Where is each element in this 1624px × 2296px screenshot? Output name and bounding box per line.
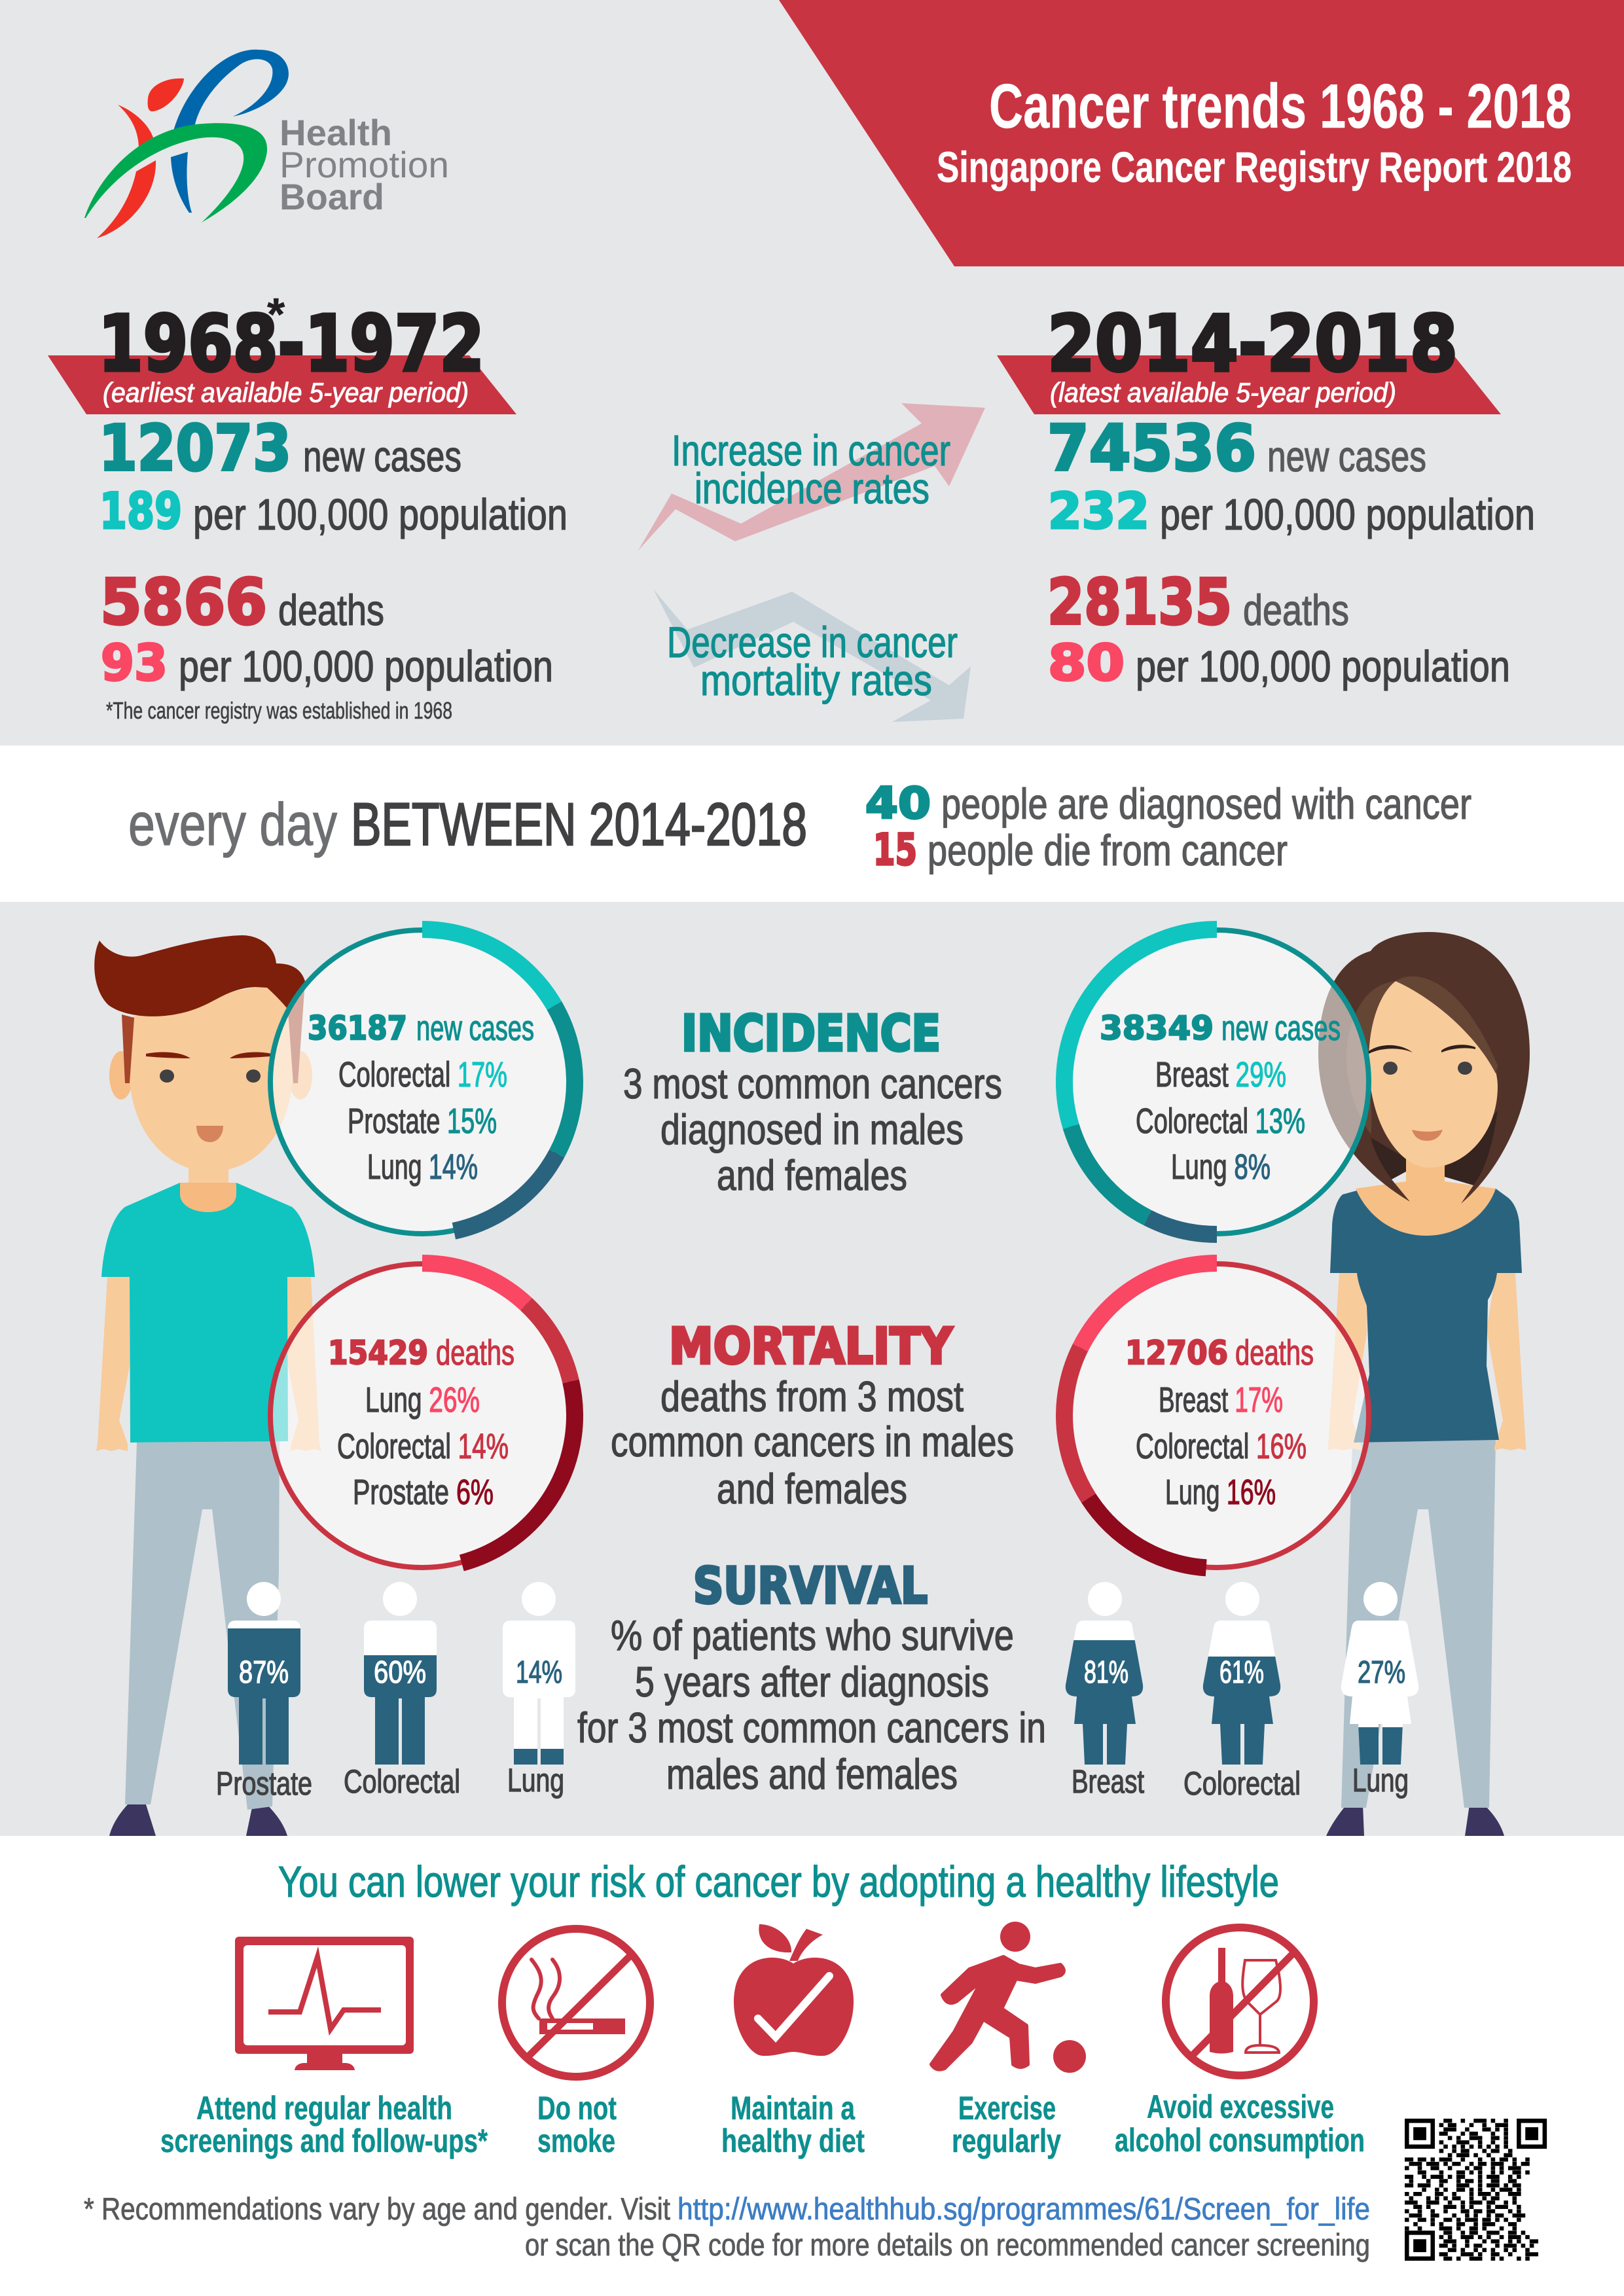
logo: Health Promotion Board: Health [280,112,392,153]
chart: male mortality ring: Lung 26% [365,1380,480,1420]
icon: no alcohol [1166,1928,1314,2075]
QR code [1405,2121,1545,2259]
chart: male incidence ring: Prostate 15% [348,1102,497,1141]
chart: female mortality ring: Breast 17% [1159,1380,1283,1420]
panel: incidence text [623,1004,1002,1199]
incidence rate 232: 232 [1048,482,1149,540]
panel: 2014-2018 statistics [997,298,1535,692]
arrow: increase [638,403,985,550]
icon: male survival lung 14% [503,1582,575,1799]
new cases 12073: 12073 [99,412,291,485]
illustration: woman [1318,932,1530,1836]
panel: trend arrows [638,403,985,722]
icon: male survival lung 14%: Lung [507,1762,564,1799]
heading: survival: SURVIVAL [693,1556,928,1615]
icon: female survival lung 27%: 27% [1358,1655,1405,1690]
chart: male incidence ring: Colorectal 17% [338,1055,507,1094]
chart: male incidence ring: new cases [416,1009,534,1048]
icon: male survival prostate 87% [216,1582,312,1802]
icon: female survival breast 81%: Breast [1072,1763,1144,1800]
panel: 1968-1972 statistics: deaths [278,586,384,634]
label: do not smoke: Do not [537,2090,617,2126]
chart: female incidence ring [1064,929,1369,1234]
chart: female incidence ring: Colorectal 13% [1136,1102,1305,1141]
panel: every day between 2014-2018: people are diagnosed with cancer [941,780,1471,828]
icon: female survival lung 27% [1341,1582,1418,1799]
deaths per day: 15 [873,825,917,875]
footnote: screening recommendations: http://www.healthhub.sg/programmes/61/Screen_for_life [677,2191,1370,2226]
chart: female mortality ring: deaths [1235,1333,1314,1372]
text: decrease in mortality: Decrease in cancer [667,618,958,666]
incidence rate 189: 189 [99,482,182,540]
chart: female mortality ring [1064,1263,1369,1568]
panel: 1968-1972 statistics: per 100,000 population [193,490,568,539]
panel: every day between 2014-2018 [128,778,1471,875]
label: do not smoke [537,2090,617,2159]
label: screenings: Attend regular health [196,2090,452,2126]
chart: female mortality ring: Colorectal 16% [1136,1427,1307,1466]
panel: 2014-2018 statistics: new cases [1267,432,1426,480]
heading: every day [128,791,337,858]
panel: mortality text: and females [717,1465,907,1513]
label: screenings: screenings and follow-ups* [160,2123,488,2159]
icon: person kicking ball [931,1922,1086,2073]
footnote: screening recommendations: * Recommendations vary by age and gender. Visit [84,2191,670,2226]
panel: mortality text: common cancers in males [611,1418,1014,1465]
label: do not smoke: smoke [537,2123,615,2159]
label: exercise [952,2090,1061,2159]
panel: 2014-2018 statistics: deaths [1243,586,1349,634]
diagnosed per day: 40 [865,778,931,829]
chart: male mortality ring: deaths [436,1333,514,1372]
label: healthy diet: Maintain a [731,2090,856,2126]
panel: 1968-1972 statistics: new cases [303,432,461,480]
illustration: man [94,935,321,1836]
chart: male mortality ring: Prostate 6% [353,1473,494,1512]
text: increase in incidence: Increase in cancer [672,426,950,475]
label: healthy diet [721,2090,865,2159]
icon: female survival breast 81% [1066,1582,1144,1800]
footnote: screening recommendations: or scan the QR code for more details on recommended cancer screening [525,2227,1370,2262]
label: avoid alcohol: alcohol consumption [1115,2122,1365,2159]
panel: 2014-2018 statistics: per 100,000 population [1160,490,1535,539]
panel: survival text: for 3 most common cancers in [577,1704,1046,1751]
deaths 28135: 28135 [1047,565,1232,639]
label: avoid alcohol: Avoid excessive [1147,2089,1334,2125]
icon: female survival colorectal 61% [1183,1582,1301,1802]
icon: male survival prostate 87%: 87% [239,1655,289,1690]
logo: Health Promotion Board [84,50,449,238]
chart: male incidence ring [270,929,575,1234]
heading: mortality: MORTALITY [669,1317,953,1375]
heading: incidence: INCIDENCE [681,1004,941,1062]
chart: female incidence ring: Breast 29% [1155,1055,1286,1094]
label: exercise: regularly [952,2123,1061,2159]
panel: every day between 2014-2018: people die from cancer [928,826,1288,874]
icon: apple with tick [734,1924,854,2056]
icon: male survival colorectal 60%: Colorectal [344,1763,460,1800]
label: exercise: Exercise [958,2090,1056,2126]
chart: female incidence ring: new cases [1221,1009,1341,1048]
chart: male incidence ring: 36187 [308,1009,407,1047]
ribbon: latest period [997,355,1501,414]
icon: male survival prostate 87%: Prostate [216,1765,312,1802]
icon: no smoking [502,1929,650,2077]
mortality rate 93: 93 [101,634,168,692]
chart: female incidence ring: 38349 [1100,1009,1214,1047]
panel: survival text: males and females [666,1750,958,1798]
icon: female survival colorectal 61%: 61% [1219,1655,1264,1690]
arrow: decrease [653,589,971,722]
chart: male mortality ring: 15429 [328,1334,428,1372]
period heading 1968-1972: 1968-1972 [98,298,484,389]
new cases 74536: 74536 [1047,412,1256,485]
chart: male mortality ring [270,1263,575,1568]
footnote: *The cancer registry was established in 1968 [106,697,452,724]
panel: 2014-2018 statistics: per 100,000 population [1136,642,1510,691]
ribbon caption: (latest available 5-year period) [1050,377,1396,408]
panel: every day between 2014-2018: BETWEEN 2014-2018 [351,791,807,858]
panel: survival text: 5 years after diagnosis [635,1658,989,1706]
chart: female mortality ring: 12706 [1125,1334,1228,1372]
ribbon: earliest period [48,355,516,414]
logo: Health Promotion Board: Board [280,176,384,217]
label: avoid alcohol [1115,2089,1365,2159]
label: screenings [160,2090,488,2159]
panel: mortality text: deaths from 3 most [660,1372,964,1420]
icon: female survival breast 81%: 81% [1084,1655,1128,1690]
panel: 1968-1972 statistics [48,289,568,724]
icon: monitor with heartbeat [235,1937,414,2070]
logo: Health Promotion Board: Promotion [280,144,449,185]
chart: female mortality ring: Lung 16% [1165,1473,1276,1512]
title banner [779,0,1624,266]
panel: 1968-1972 statistics: per 100,000 population [179,642,553,691]
panel: survival text [577,1556,1046,1798]
panel: incidence text: diagnosed in males [660,1105,964,1153]
icon: male survival lung 14%: 14% [516,1655,562,1690]
icon: female survival lung 27%: Lung [1352,1762,1409,1799]
footnote: screening recommendations [84,2191,1370,2262]
panel: trend arrows: mortality rates [700,656,932,704]
panel: incidence text: and females [717,1151,907,1199]
ribbon caption: (earliest available 5-year period) [103,377,469,408]
asterisk: * [267,289,285,340]
chart: male incidence ring: Lung 14% [367,1147,478,1187]
panel: mortality text [611,1317,1014,1513]
icon: female survival colorectal 61%: Colorectal [1183,1765,1301,1802]
chart: female incidence ring: Lung 8% [1171,1147,1271,1187]
icon: male survival colorectal 60% [344,1582,460,1800]
panel: incidence text: 3 most common cancers [623,1060,1002,1107]
period heading 2014-2018: 2014-2018 [1047,298,1458,389]
mortality rate 80: 80 [1048,634,1125,692]
icon: male survival colorectal 60%: 60% [374,1655,426,1690]
chart: male mortality ring: Colorectal 14% [337,1427,509,1466]
label: healthy diet: healthy diet [721,2123,865,2159]
panel: survival text: % of patients who survive [611,1611,1014,1659]
panel: trend arrows: incidence rates [695,464,929,512]
heading: lower your risk: You can lower your risk of cancer by adopting a healthy lifestyle [278,1857,1279,1907]
deaths 5866: 5866 [100,565,267,639]
